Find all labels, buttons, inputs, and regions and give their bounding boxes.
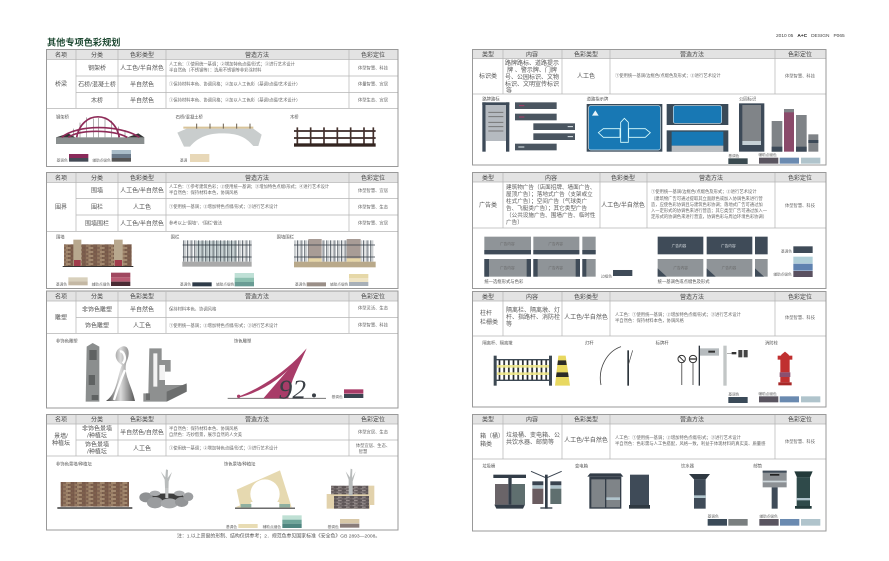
stone bridge [176,114,262,147]
table header: 色彩定位 [788,174,812,182]
swatches: bridges: 基调色 [57,157,68,162]
table rows [480,306,816,328]
illustrations: bridges [56,114,376,162]
table header: 内容 [526,416,538,424]
table rows: 人工色/半自然色 [564,313,608,321]
wall with fence [277,233,376,267]
iron fence: 围栏 [171,233,180,240]
table rows: /种植坛 [87,432,107,440]
drinking fountain [681,463,710,509]
swatches: sculpture: 基调色 [332,394,343,399]
table rows: 人工色 [133,322,151,330]
table rows: 饰色景墙 [85,440,109,448]
swatches: signage: 基调色 [728,153,740,158]
table rows: ①使用统一基调；②增加特色点缀/形式；③进行艺术设计 [169,322,278,329]
swatches: bridges [57,150,209,162]
table rows: 定形式的协调色来进行营造，协调色彩与周边环境色彩协调） [651,213,767,220]
swatches: feature walls [226,515,359,529]
table rows: 共饮水器、邮筒等 [506,438,554,446]
drinking fountain: 饮水器 [681,463,695,470]
table rows: 体型灵活、生态 [358,304,389,312]
table header [55,174,385,182]
billboards: unified form: 广告内容 [548,265,563,270]
swatches: walls and fences [56,273,368,286]
table rows: 桥梁 [55,80,67,88]
swatches: walls and fences: 辅助点缀色 [216,281,235,286]
swatches: walls and fences: 基调色 [56,281,67,286]
illustrations: signage [482,95,820,164]
uncoloured wall and planter: 非饰色景墙/种植坛 [56,460,92,467]
swatches: feature walls: 辅助点缀色 [263,524,281,529]
table header: 内容 [526,50,538,58]
swatches: street furniture [708,513,820,526]
coloured sculpture: 饰色雕塑 [234,337,252,344]
road signs: 路牌路标 [482,95,500,102]
table header: 营造方法 [245,174,269,182]
wood bridge: 木桥 [290,114,299,121]
table header: 分类 [91,416,103,424]
table rows: 参考以上“围墙”、“围栏”做法 [169,220,223,226]
table rows: 人工色：①使用统一基调；②增加特色点缀/形式；③进行艺术设计 [169,60,296,68]
table header: 营造方法 [680,293,704,301]
page header: issue and page number: 2010 05 A+C DESIGN P065 [776,33,845,39]
swatches: signage: 辅助点缀色 [758,152,777,157]
table rows: 人工色：①使用统一基调；②增加特色点缀/形式；③进行艺术设计 [615,434,742,441]
swatches: signage [728,152,820,164]
road signs [482,95,575,152]
table rows: 人工色/半自然色 [120,64,164,72]
table rows: 标识类 [479,72,497,80]
table rows [480,431,816,448]
table rows: 保持材料本色、协调风格 [169,306,217,312]
table rows: 半自然色：保持材料本色，协调风格 [615,317,684,324]
table rows: 体型智慧、科技 [785,438,816,445]
table rows: 号、公园标识、文物 [505,73,559,81]
table rows: 围栏 [91,203,103,211]
table header: 色彩类型 [130,292,154,300]
table rows: ①保持材料本色、协调风格；②加以人工色彩（基调/点缀/艺术设计） [169,96,300,104]
table header: 色彩类型 [130,416,154,424]
table rows: 人工色 [577,72,595,80]
table rows: 非饰色雕塑 [82,306,112,314]
table rows: 人工色：①参考建筑色彩；②使用统一基调；③增加特色点缀/形式；④进行艺术设计 [169,183,330,190]
table rows: ①使用统一基调/边框色/点缀色及形式；②进行艺术设计 [651,188,757,195]
billboards: unified form: 统一选框形式与色彩 [484,278,524,285]
table header: 色彩类型 [574,293,598,301]
billboards: unified form: 广告内容 [500,265,515,270]
table rows: 等 [506,320,512,328]
table rows: 告、飞艇类广告）；其它类型广告 [506,204,588,212]
table header: 色彩定位 [788,50,812,58]
swatches: walls and fences: 基调色 [180,281,191,286]
table rows: 等 [506,86,512,94]
coloured wall and planter: 饰色景墙/种植坛 [224,460,256,467]
billboards: unified form: 广告内容 [548,241,563,246]
panel: walls and fences [46,172,398,288]
table rows: 体型智慧、科技 [358,322,389,328]
trash bins: 垃圾桶 [482,463,495,470]
swatches: street furniture: 基调色 [708,513,719,518]
table header: 色彩定位 [361,416,385,424]
road direction signs: 道路指示牌 [587,95,609,102]
table header [55,292,385,300]
table rows: 体量智慧、宜居 [358,80,389,88]
table header: 分类 [91,51,103,59]
table rows: ①使用统一基调；②增加特色点缀/形式；③进行艺术设计 [169,203,278,210]
table rows: 造，应使色彩协调且与建筑色彩协调；落地式广告可通过加 [651,201,763,208]
table header: 内容 [526,293,538,301]
iron fence [171,233,252,267]
swatches: advertising [773,246,813,277]
table rows [55,183,389,228]
uncoloured sculptures [56,337,187,402]
table header: 类型 [482,293,494,301]
table rows: 柱式广告）；空间广告（气球类广 [506,197,588,205]
uncoloured sculptures: 非饰色雕塑 [56,337,78,344]
table rows: 景墙/ [54,432,68,440]
table rows: 非饰色景墙 [82,424,112,432]
table rows: 体型智慧、科技 [785,202,816,209]
table header: 色彩定位 [788,293,812,301]
panel: poles and barriers [472,292,826,407]
panel: sculpture [46,291,398,408]
table rows: （公共设施广告、围墙广告、临时性 [506,211,596,219]
transformer boxes [575,463,650,509]
table header: 分类 [91,292,103,300]
table header: 色彩定位 [361,174,385,182]
table header: 色彩定位 [361,51,385,59]
table rows: 半自然色 [130,80,154,88]
panel: signage [472,50,826,165]
swatches: poles [728,391,820,403]
swatches: walls and fences: 辅助点缀色 [92,281,110,286]
table rows: 体型智慧、科技 [785,314,816,321]
coloured wall and planter [224,460,374,509]
table rows: 半自然色 [130,306,154,314]
table rows: 人工色/半自然色 [120,220,164,228]
transformer boxes: 变电箱 [575,463,589,470]
table rows [479,59,816,94]
table header: 色彩定位 [788,416,812,424]
swatches: feature walls: 基调色 [226,524,237,529]
table rows: 入一定形式的协调色来进行营造；其它类型广告可通过加入一 [651,207,768,214]
illustrations: feature walls and planters [56,460,374,529]
table rows: 半自然色：保持材料本色，协调风格 [169,189,238,196]
table rows: 围界 [55,204,67,211]
wall with fence: 围墙围栏 [277,233,295,240]
table rows: （建筑物广告可通过提取其立面颜色或加入协调色来进行营 [651,195,763,202]
table rows: 人工色/半自然色 [564,436,608,444]
table header [482,293,812,301]
fire hydrant: 消防栓 [765,340,779,347]
wood bridge [290,114,376,147]
barrier and bollard [482,340,570,386]
coloured sculpture: 92 [279,374,306,404]
table rows: 人工色/半自然色 [601,201,645,209]
table rows [52,424,390,456]
table rows: 人工色 [133,203,151,211]
table rows: 牌 、警示牌、门牌 [507,66,557,74]
billboards: unified colour: 广告内容 [672,243,687,248]
table header: 色彩定位 [361,292,385,300]
table header [55,51,385,59]
table header [482,174,812,182]
table rows: 垃圾桶、变电箱、公 [506,431,560,439]
table rows: 体型智慧、生态 [358,204,389,210]
trash bins [482,463,562,509]
panel: advertising [472,172,826,288]
table rows: 体型智慧、宜居 [358,187,389,194]
table rows: 体型智慧、科技 [785,72,816,80]
swatches: feature walls: 基调色 [328,524,339,529]
table rows: /种植坛 [87,448,107,456]
table header: 类型 [482,50,494,58]
table header: 营造方法 [680,416,704,424]
swatches: poles: 基调色 [728,392,740,397]
table rows: 隔离栏、隔离墩、灯 [506,306,560,314]
table rows: 雕塑 [55,314,67,322]
table rows: 体型生态、宜居 [358,96,389,104]
table rows: 人工色/半自然色 [120,186,164,194]
road direction signs [587,95,728,152]
illustrations: sculpture [56,337,363,404]
billboards: unified form: 边框色 [601,274,612,279]
table rows [55,60,389,104]
swatches: bridges: 辅助点缀色 [92,157,111,162]
park signs [739,95,818,152]
table rows: 体型宜居、生态 [358,428,389,436]
table rows: 半自然色 [130,96,154,104]
table header: 色彩类型 [130,174,154,182]
panel: boxes and street furniture [472,414,826,531]
table header: 色彩类型 [574,50,598,58]
table rows: 人工色 [133,444,151,452]
table rows: 智慧 [359,448,368,455]
table rows: 建筑物广告（店面招牌、墙面广告、 [506,183,596,191]
table header: 营造方法 [245,416,269,424]
table header: 分类 [91,174,103,182]
table rows: 箱（桶） [480,432,504,440]
table rows: 屋顶广告）；落地式广告（支架或立 [506,190,593,198]
table rows: 钢架桥 [88,64,106,72]
illustrations: advertising [484,237,813,285]
title: 其他专项色彩规划 [47,36,120,48]
fire hydrant [765,340,792,385]
table header [55,416,385,424]
table rows: 人工色：①使用统一基调；②增加特色点缀/形式；③进行艺术设计 [615,311,742,318]
lamp poles [585,340,633,386]
table header: 营造方法 [680,50,704,58]
table header: 名项 [55,174,67,182]
table rows: 广告） [506,218,523,226]
stone bridge: 石桥/混凝土桥 [176,114,204,121]
table rows: 柱杆 [480,309,492,317]
swatches: advertising: 辅助点缀色 [773,272,792,277]
illustrations: poles and barriers [482,340,820,403]
billboards: unified form [484,237,632,285]
table rows: 饰色雕塑 [85,322,109,330]
table rows: 石桥/混凝土桥 [78,80,116,88]
table rows: 杆、指路杆、消防栓 [506,313,560,321]
table rows: 体型宜居、生态、 [356,442,390,449]
footnote: 注：1.以上景窗的形制、结构仅供参考；2．规范色参见国家标准《安全色》GB 2893—2008。 [177,532,380,540]
billboards: unified colour [658,237,768,285]
table header: 类型 [482,174,494,182]
table header: 类型 [482,416,494,424]
table header: 营造方法 [245,292,269,300]
billboards: unified colour: 广告内容 [721,243,736,248]
swatches: walls and fences: 辅助点缀色 [330,281,349,286]
table rows: 标识、文明宣传标识 [505,80,559,88]
table header: 名项 [55,292,67,300]
mailboxes [753,463,813,509]
brick wall: 围墙 [56,233,65,240]
steel bridge [56,114,144,144]
sign poles: 标牌杆 [656,340,669,347]
billboards: unified form: 广告内容 [500,241,515,246]
table header: 内容 [545,174,557,182]
mailboxes: 邮筒 [753,463,763,470]
table header: 名项 [55,51,67,59]
swatches: sculpture [332,389,363,399]
swatches: bridges: 基调 [180,157,188,162]
table rows: ①使用统一基调/边框色/点缀色及形式；②进行艺术设计 [615,72,721,79]
coloured sculpture [228,337,326,404]
table rows [55,304,389,330]
table rows: 箱类 [480,440,492,448]
table rows: 栏栅类 [480,318,498,326]
table rows: 围墙围栏 [85,220,109,228]
table rows: 半自然色/自然色 [120,428,164,436]
table header: 色彩类型 [611,174,635,182]
billboards: unified colour: 广告内容 [673,265,688,270]
panel: bridges [46,50,398,166]
illustrations: street furniture [482,463,820,526]
swatches: street furniture: 辅助点缀色 [759,513,778,518]
table rows: 半自然色：色彩需与人工色搭配，风格一致，利益于体现材料的真实美、质量感 [615,440,766,447]
uncoloured wall and planter [56,460,193,509]
table rows: 广告类 [479,201,497,209]
lamp poles: 灯杆 [585,340,594,347]
table rows: 围墙 [91,186,103,194]
swatches: advertising: 基调色 [781,248,792,253]
swatches: walls and fences: 基调色 [295,281,306,286]
table rows: ①使用统一基调；②增加特色点缀/形式；③进行艺术设计 [169,444,278,452]
table rows: 半自然色：保持材料本色、协调风格 [169,425,238,432]
billboards: unified colour: 统一基调色或点缀色及形式 [658,278,710,285]
table rows: 体型智慧、宜居 [358,220,389,226]
table header: 名项 [55,416,67,424]
table header: 色彩类型 [130,51,154,59]
table rows: 路牌路标、道路提示 [505,59,559,67]
table header: 营造方法 [699,174,723,182]
table rows [479,183,816,226]
steel bridge: 钢架桥 [56,114,70,121]
table rows: 木桥 [91,96,103,104]
brick wall [56,233,133,267]
table rows: 自然色：巧妙借景，展示自然的人文美 [169,431,243,438]
table header [482,50,812,58]
table header [482,416,812,424]
barrier and bollard: 隔离杆、隔离墩 [482,340,513,347]
billboards: unified colour: 广告内容 [722,265,737,270]
table rows: 体型智慧、科技 [358,64,389,72]
panel: feature walls and planters [46,414,398,530]
table rows: ①保持材料本色、协调风格；②加以人工色彩（基调/点缀/艺术设计） [169,80,300,88]
sign poles [656,340,748,386]
table header: 营造方法 [245,51,269,59]
table header: 色彩类型 [574,416,598,424]
park signs: 公园标识 [739,95,757,102]
illustrations: walls and fences [56,233,376,286]
table rows: 半自然色（不锈钢等）：选用不锈钢等非彩涂材料 [169,66,262,74]
swatches: poles: 辅助点缀色 [758,391,777,396]
table rows: 种植坛 [52,439,70,447]
